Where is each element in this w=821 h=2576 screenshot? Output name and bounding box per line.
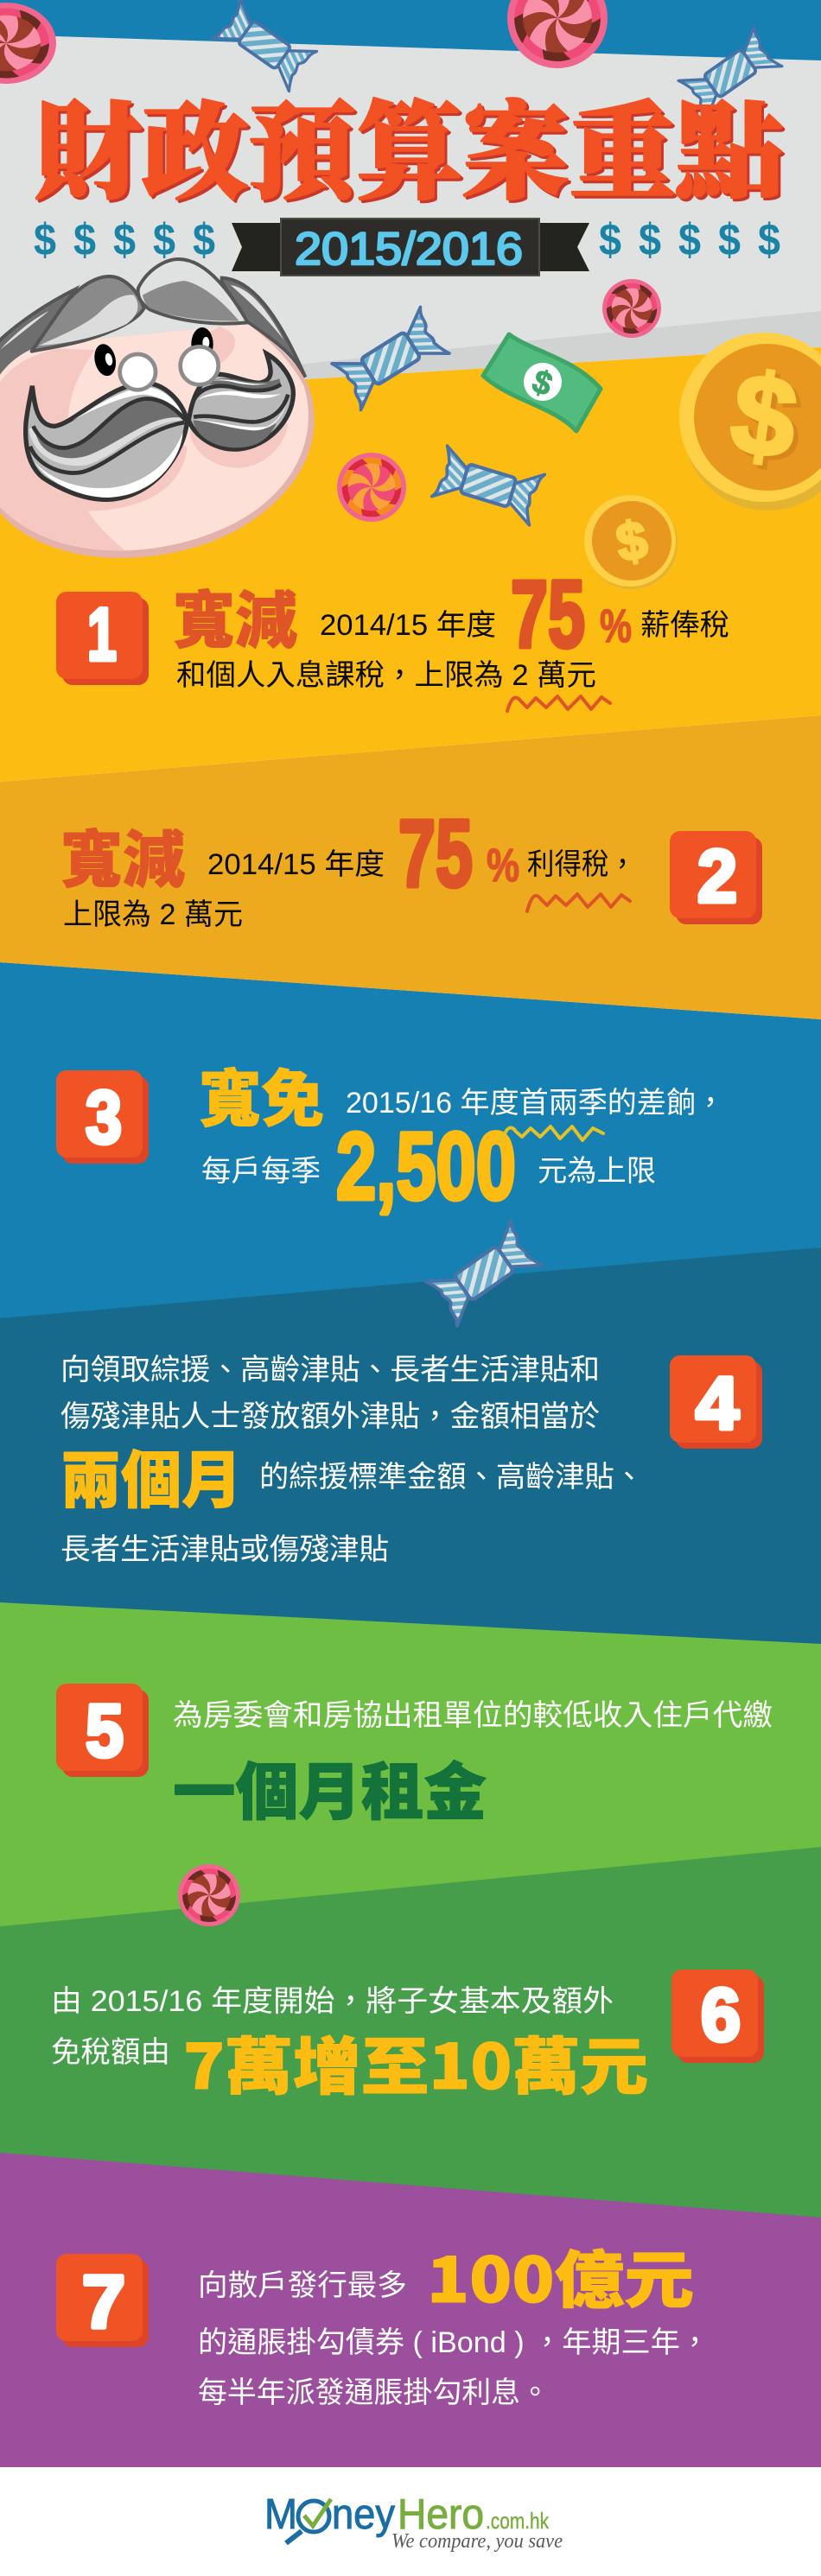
candy: swirl between 5 and 6	[166, 1854, 247, 1936]
face shading right	[190, 423, 288, 468]
dollar signs right	[599, 215, 780, 265]
badge 3: 3	[86, 1076, 122, 1159]
text: 的通脹掛勾債券 ( iBond ) ，年期三年，	[198, 2326, 710, 2359]
text: 由 2015/16 年度開始，將子女基本及額外	[51, 1985, 614, 2018]
banknote: $	[527, 364, 557, 403]
character: moustached man	[0, 259, 315, 558]
text: 向散戶發行最多	[198, 2269, 407, 2302]
panel 4	[60, 1354, 762, 1566]
face shading left	[0, 348, 188, 550]
dollar signs right: $	[678, 215, 701, 265]
logo: MoneyHero: .com.hk	[486, 2508, 550, 2534]
text: 薪俸稅	[640, 609, 729, 642]
heading 7萬增至10萬元: 7萬增至10萬元	[183, 2016, 648, 2107]
panel 7	[56, 2230, 710, 2409]
moustache right	[188, 353, 293, 449]
percent: %	[600, 600, 632, 652]
candy: wrapped top right	[678, 27, 783, 120]
panel 3	[56, 1049, 725, 1220]
face	[0, 324, 309, 550]
coin: small	[584, 495, 678, 589]
logo: MoneyHero: ney	[332, 2491, 395, 2538]
tagline: We compare, you save	[391, 2530, 563, 2553]
hair back right	[222, 278, 305, 378]
candy: swirl under ribbon	[591, 270, 668, 346]
badge 5: 5	[86, 1690, 124, 1773]
text: 每戶每季	[201, 1155, 321, 1188]
heading 寬減: 寬減	[173, 570, 297, 661]
candy: wrapped top left	[212, 0, 317, 92]
text: 2014/15 年度	[320, 609, 496, 642]
logo: MoneyHero	[264, 2482, 563, 2553]
number 75: 75	[511, 562, 585, 668]
text: 利得稅，	[527, 848, 636, 881]
dollar signs right: $	[599, 215, 621, 265]
coin: large	[679, 333, 821, 511]
dollar signs left: $	[193, 215, 215, 265]
title: 財政預算案重點	[35, 68, 783, 219]
badge 6	[671, 1970, 764, 2063]
candy: wrapped centre	[331, 307, 450, 410]
number 2,500: 2,500	[336, 1114, 516, 1220]
text: 2014/15 年度	[207, 848, 385, 881]
logo: MoneyHero: o	[296, 2482, 331, 2540]
panel 1	[56, 562, 729, 711]
band: blue	[0, 962, 821, 1318]
text: 2015/16 年度首兩季的差餉，	[346, 1087, 725, 1120]
badge 4: 4	[696, 1362, 739, 1445]
cheek shading	[201, 327, 235, 365]
year ribbon: 2015/2016	[295, 224, 523, 275]
dollar signs right: $	[639, 215, 661, 265]
band: light green	[0, 1589, 821, 1926]
dollar signs left: $	[153, 215, 175, 265]
coin: large: $	[724, 348, 805, 483]
heading 寬減: 寬減	[60, 809, 185, 900]
candy: orange swirl	[324, 441, 414, 532]
badge 2: 2	[697, 835, 737, 918]
band: yellow	[0, 347, 821, 782]
dollar signs right: $	[758, 215, 780, 265]
text: 每半年派發通脹掛勾利息。	[198, 2376, 550, 2409]
band: amber	[0, 715, 821, 1019]
band: darker grey strip	[0, 311, 821, 398]
band: dark blue	[0, 1247, 821, 1644]
coin: large: $	[729, 352, 809, 487]
badge 1	[56, 592, 149, 685]
head outer	[0, 324, 315, 558]
badge 6: 6	[701, 1974, 741, 2057]
text: 為房委會和房協出租單位的較低收入住戶代繳	[173, 1699, 773, 1732]
logo: MoneyHero: M	[264, 2491, 297, 2538]
banknote	[483, 334, 601, 431]
badge 1: 1	[87, 593, 117, 676]
badge 4	[670, 1355, 762, 1449]
squiggle	[507, 696, 610, 711]
text: 上限為 2 萬元	[63, 898, 243, 931]
text: 免稅額由	[51, 2036, 170, 2069]
hair left lock	[32, 276, 144, 352]
badge 7	[56, 2254, 149, 2347]
logo: MoneyHero: Hero	[398, 2491, 484, 2538]
heading 寬免: 寬免	[199, 1049, 324, 1139]
squiggle	[527, 894, 630, 911]
moustache left	[26, 383, 188, 499]
text: 和個人入息課稅，上限為 2 萬元	[176, 659, 596, 692]
badge 3	[56, 1070, 149, 1164]
text: 向領取綜援、高齡津貼、長者生活津貼和	[60, 1354, 600, 1386]
band: dark green	[0, 1814, 821, 2218]
badge 2	[670, 831, 762, 924]
panel 5	[56, 1684, 773, 1832]
year ribbon	[232, 219, 589, 276]
dollar signs right: $	[718, 215, 741, 265]
text: 長者生活津貼或傷殘津貼	[60, 1533, 389, 1566]
eyes	[92, 342, 118, 378]
band: purple	[0, 2142, 821, 2467]
percent: %	[487, 840, 519, 891]
candy: swirl top left	[0, 0, 68, 96]
text: 傷殘津貼人士發放額外津貼，金額相當於	[60, 1400, 600, 1433]
dollar signs left	[34, 215, 215, 265]
heading 兩個月: 兩個月	[60, 1430, 242, 1520]
band: top blue	[0, 0, 821, 69]
candy: wrapped between 3 and 4	[425, 1221, 543, 1326]
badge 5	[56, 1684, 149, 1777]
text: 元為上限	[538, 1155, 656, 1188]
band: light grey header	[0, 35, 821, 397]
dollar signs left: $	[73, 215, 96, 265]
coin: small: $	[612, 510, 652, 574]
panel 6	[51, 1970, 764, 2107]
heading 一個月租金: 一個月租金	[173, 1742, 487, 1832]
panel 2	[60, 801, 762, 931]
number 75: 75	[398, 801, 473, 907]
title: 財政預算案重點	[37, 71, 786, 222]
dollar signs left: $	[113, 215, 136, 265]
badge 7: 7	[82, 2261, 125, 2344]
hair back left	[0, 289, 75, 429]
hair highlights	[0, 311, 49, 350]
candy: swirl top centre	[488, 0, 620, 83]
dollar signs left: $	[34, 215, 56, 265]
text: 的綜援標準金額、高齡津貼、	[259, 1461, 644, 1494]
hair right lock	[138, 259, 248, 324]
squiggle	[502, 1126, 603, 1140]
candy: wrapped lower	[432, 445, 544, 526]
glasses	[120, 354, 156, 390]
heading 100億元: 100億元	[427, 2230, 694, 2320]
